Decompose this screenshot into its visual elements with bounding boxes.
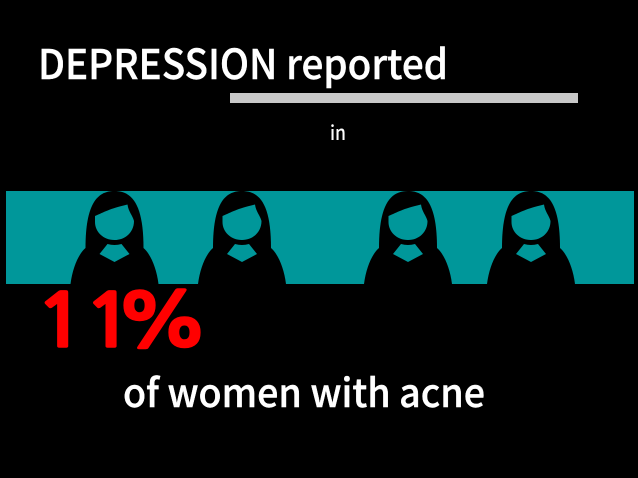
teal band bbox=[6, 191, 634, 284]
grey divider bar bbox=[230, 93, 578, 103]
icon: woman 4 bbox=[487, 191, 575, 284]
icon: woman 1 bbox=[70, 191, 158, 284]
statistic: 11%: 11% bbox=[34, 286, 210, 359]
icon: woman 3 bbox=[364, 191, 452, 284]
caption: of women with acne bbox=[123, 363, 485, 419]
connector text: in: in bbox=[330, 117, 346, 146]
icon: woman 2 bbox=[198, 191, 286, 284]
title: DEPRESSION reported bbox=[38, 31, 448, 91]
